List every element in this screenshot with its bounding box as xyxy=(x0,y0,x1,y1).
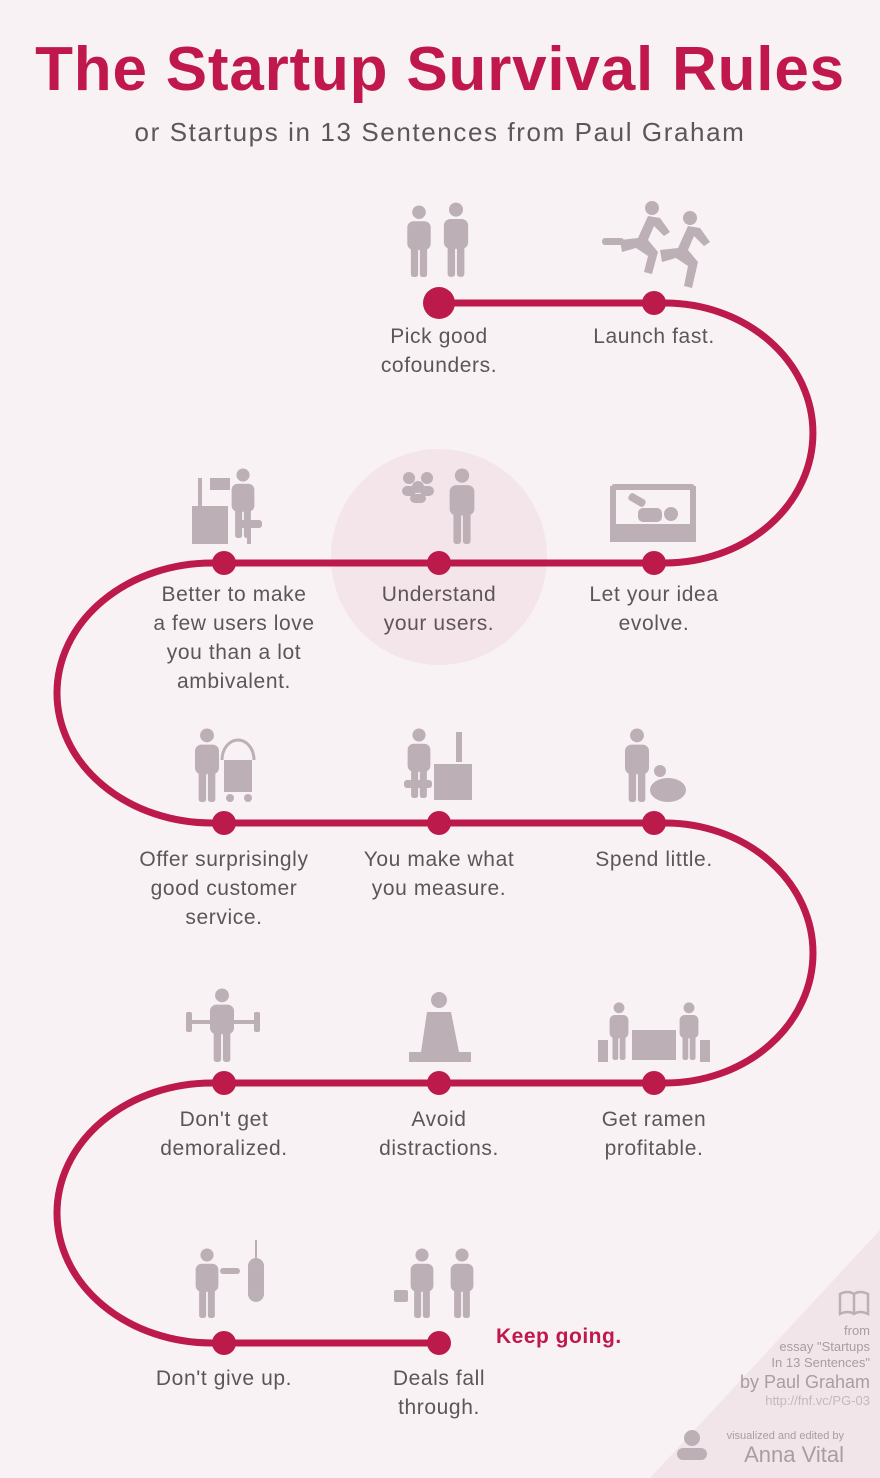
credits xyxy=(740,1323,870,1408)
decorative corner triangle xyxy=(650,1230,880,1478)
label 12: Don't give up. xyxy=(156,1367,292,1390)
icon: users xyxy=(402,468,474,544)
label 13 xyxy=(393,1367,485,1419)
icon: idea evolve cradle xyxy=(610,484,696,542)
label 13: through. xyxy=(398,1396,480,1419)
label 2: Launch fast. xyxy=(593,325,715,348)
label 4: Understand xyxy=(382,583,496,606)
label 13: Deals fall xyxy=(393,1367,485,1390)
author credit: visualized and edited by xyxy=(727,1430,844,1442)
label 3: you than a lot xyxy=(167,641,301,664)
icon: desk worker xyxy=(192,468,262,544)
subtitle: or Startups in 13 Sentences from Paul Graham xyxy=(135,117,745,147)
credits: by Paul Graham xyxy=(740,1372,870,1392)
credits: http://fnf.vc/PG-03 xyxy=(765,1393,870,1408)
label 3 xyxy=(153,583,315,693)
label 6 xyxy=(139,848,309,929)
icon: bellhop xyxy=(195,728,254,802)
label 7: you measure. xyxy=(372,877,506,900)
milestone dots xyxy=(212,287,666,1355)
label 7 xyxy=(364,848,514,900)
label 4 xyxy=(382,583,496,635)
icon: weightlifter xyxy=(186,988,260,1062)
credits: from xyxy=(844,1323,870,1338)
label 10: Avoid xyxy=(411,1108,467,1131)
label 5 xyxy=(589,583,719,635)
label 6: good customer xyxy=(151,877,297,900)
label 4: your users. xyxy=(384,612,494,635)
highlight circle xyxy=(331,449,547,665)
label 3: ambivalent. xyxy=(177,670,291,693)
label 7: You make what xyxy=(364,848,514,871)
icon: meditation xyxy=(409,992,471,1062)
icon: punching bag xyxy=(196,1240,264,1318)
credits: In 13 Sentences" xyxy=(771,1355,870,1370)
icon: runners xyxy=(602,201,710,288)
keep going: Keep going. xyxy=(496,1325,622,1348)
label 3: a few users love xyxy=(153,612,315,635)
icon: cofounders xyxy=(407,203,468,277)
credits: essay "Startups xyxy=(779,1339,870,1354)
label 10: distractions. xyxy=(379,1137,499,1160)
icon: book xyxy=(840,1292,868,1314)
icon: piggy bank xyxy=(625,728,686,802)
label 9: demoralized. xyxy=(160,1137,288,1160)
icon: walking people xyxy=(394,1248,473,1318)
author credit: Anna Vital xyxy=(744,1442,844,1467)
title: The Startup Survival Rules xyxy=(35,35,845,104)
label 11: profitable. xyxy=(605,1137,703,1160)
label 6: Offer surprisingly xyxy=(139,848,309,871)
icon: measure desk xyxy=(404,728,472,800)
label 3: Better to make xyxy=(162,583,306,606)
label 9: Don't get xyxy=(180,1108,268,1131)
label 11: Get ramen xyxy=(602,1108,706,1131)
label 6: service. xyxy=(185,906,263,929)
path line xyxy=(57,303,813,1343)
label 10 xyxy=(379,1108,499,1160)
label 1: Pick good xyxy=(390,325,488,348)
label 1 xyxy=(381,325,497,377)
label 1: cofounders. xyxy=(381,354,497,377)
label 9 xyxy=(160,1108,288,1160)
label 5: Let your idea xyxy=(589,583,719,606)
label 8: Spend little. xyxy=(595,848,713,871)
icon: ramen table xyxy=(598,1002,710,1062)
label 11 xyxy=(602,1108,706,1160)
icon: author xyxy=(677,1430,707,1460)
label 5: evolve. xyxy=(619,612,689,635)
author credit xyxy=(726,1430,844,1467)
